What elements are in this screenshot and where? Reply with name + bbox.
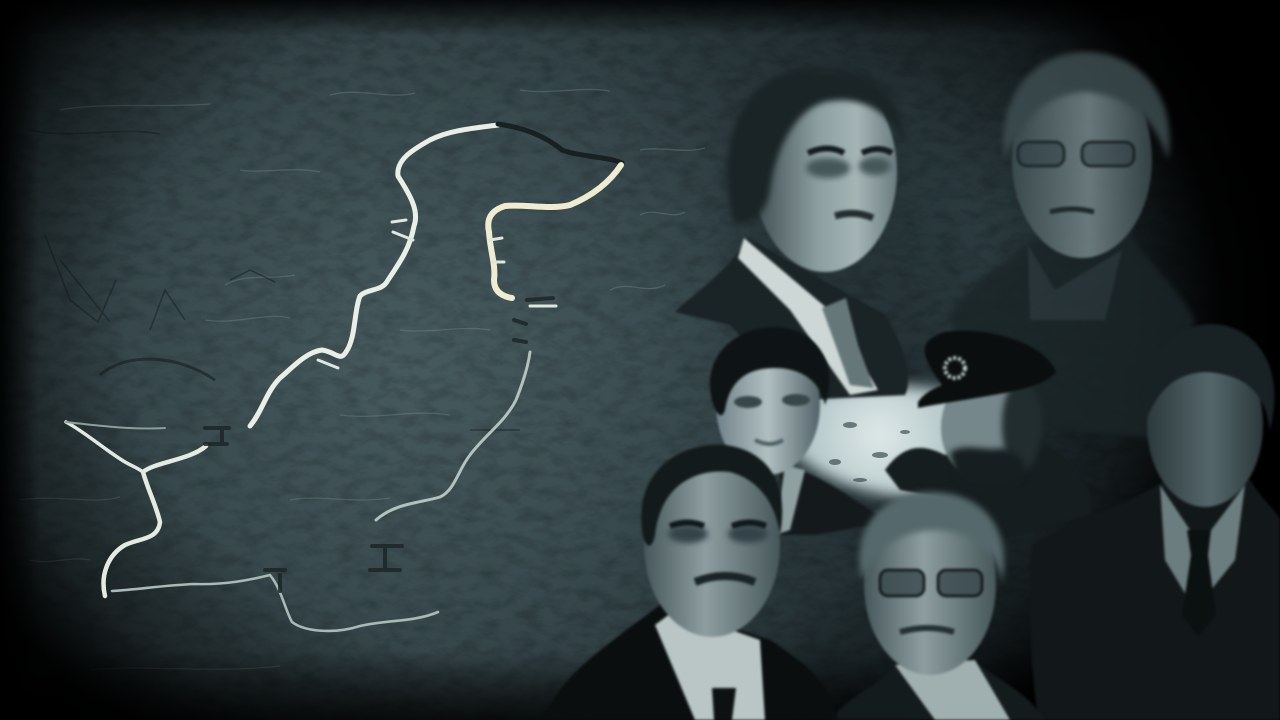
map: south coast (112, 575, 438, 631)
map: border notches (205, 298, 553, 591)
cap (918, 331, 1056, 408)
map: western spur (66, 422, 143, 472)
glasses (880, 570, 982, 596)
portrait: bottom left man (545, 445, 838, 720)
portrait: right man (1030, 324, 1280, 720)
map: eastern arm (488, 165, 621, 298)
portrait: upper right man (950, 52, 1195, 440)
map: north-east cap (498, 124, 622, 163)
map: eastern border (376, 352, 530, 520)
map: northern border (250, 125, 498, 426)
map: western border (104, 446, 206, 596)
portrait: bottom centre man (830, 492, 1045, 720)
glow behind portraits (790, 386, 1018, 498)
map outline (66, 124, 622, 631)
cap badge (945, 358, 965, 378)
portrait: man in peaked cap (885, 331, 1091, 540)
portrait: top centre man (675, 68, 908, 400)
suit (675, 238, 908, 400)
glasses (1018, 142, 1134, 166)
portrait: middle left man (710, 327, 878, 535)
